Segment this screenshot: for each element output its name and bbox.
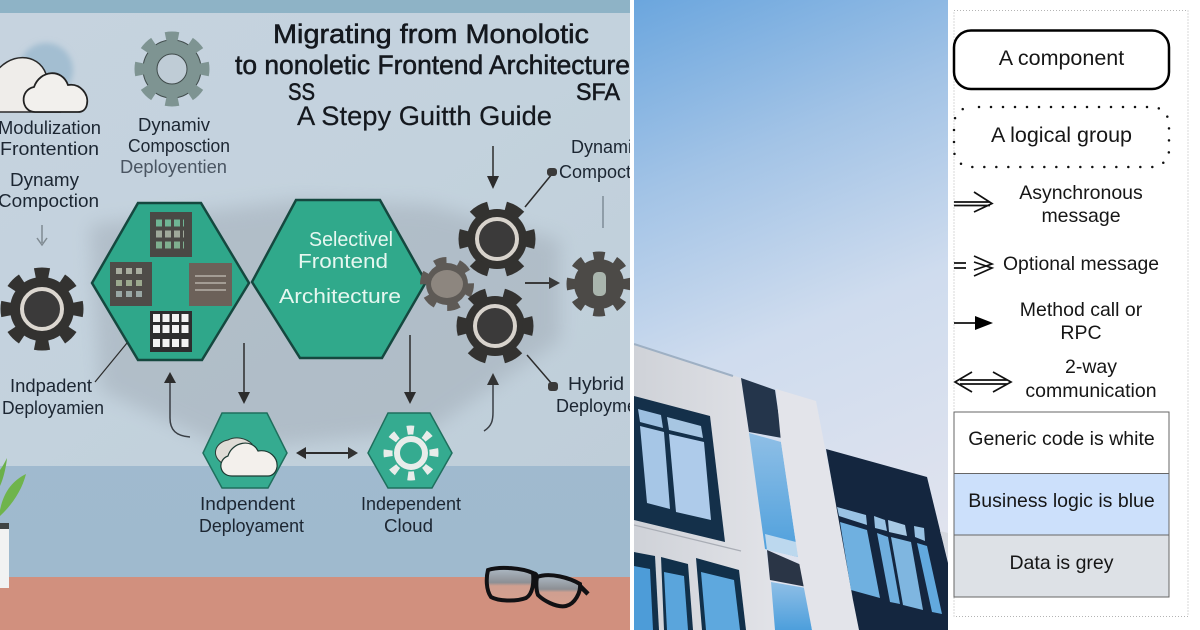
window glass upper left: [638, 409, 711, 520]
arrow: grey down: [37, 225, 47, 245]
label: modulization: Compoction: [0, 191, 99, 211]
legend: asynchronous message: message: [1041, 205, 1121, 227]
icon: black gear lower: [462, 293, 528, 359]
label: independent deployment bottom: Deployament: [199, 516, 304, 536]
title: SS: [288, 79, 315, 106]
arrow: into upper gear: [487, 146, 499, 189]
title: SFA: [576, 79, 620, 106]
row: data: [954, 535, 1169, 597]
title: Migrating from Monolotic: [273, 19, 589, 49]
icon: plant: [0, 458, 26, 588]
label: independent deployment bottom: [199, 494, 304, 536]
label: dynamic composition: Composction: [128, 136, 230, 156]
window frame upper left: [634, 396, 725, 542]
label: independent cloud: Cloud: [384, 516, 433, 536]
hexagon: modules: [92, 203, 249, 360]
legend: component: A component: [999, 46, 1124, 70]
legend: logical group: [954, 107, 1169, 167]
legend: 2-way communication: [955, 356, 1157, 402]
title: [235, 19, 630, 131]
legend: asynchronous message: [954, 182, 1143, 227]
arrow: down to cloud hex: [238, 343, 250, 404]
connector: upper gear to label: [525, 168, 557, 207]
icon: glasses: [487, 568, 588, 606]
label: independent deployment bottom: Indpendent: [200, 494, 295, 514]
roof edge: [634, 344, 733, 376]
card: left module: [110, 262, 152, 306]
label: hybrid deployment: [556, 374, 652, 416]
right edge block: [940, 531, 948, 560]
dark band: [767, 550, 807, 587]
connector: lower gear to hybrid: [527, 355, 558, 391]
panel: building photo: [634, 0, 948, 630]
legend: colour key table: [954, 412, 1169, 597]
legend: logical group: A logical group: [991, 123, 1132, 147]
panel: legend: [948, 0, 1200, 630]
legend: method call: RPC: [1060, 322, 1102, 344]
brick floor line: [634, 525, 741, 551]
dark block: [826, 449, 948, 630]
board shadow area: [90, 200, 560, 450]
middle glass: [749, 433, 798, 557]
middle dark strip: [741, 378, 782, 438]
legend dotted border: [954, 10, 1188, 616]
title: A Stepy Guitth Guide: [297, 101, 552, 131]
label: modulization: Modulization: [0, 118, 101, 138]
icon: grey gear: [140, 37, 204, 101]
arrow: down to gear hex: [404, 335, 416, 404]
lower left windows: [634, 552, 746, 630]
label: hybrid deployment: Hybrid: [568, 374, 624, 394]
label: dynamic right: Dynamic: [571, 137, 641, 157]
legend: component: [954, 30, 1169, 89]
divider: white strip between images: [630, 0, 634, 630]
legend: 2-way communication: 2-way: [1065, 356, 1117, 378]
row: business logic: [954, 474, 1169, 535]
label: dynamic right: Compoction: [559, 162, 655, 182]
label: dynamic right: [559, 137, 655, 182]
label: independent deployment left: [2, 376, 104, 418]
hexagon: selective frontend architecture: Frontend: [298, 251, 388, 273]
label: independent deployment left: Deployamien: [2, 398, 104, 418]
white brick block right: [776, 389, 860, 630]
hexagon: selective frontend architecture: Architecture: [279, 286, 401, 308]
hexagon: cloud: [203, 413, 287, 488]
label: modulization: [0, 118, 101, 211]
icon: black gear upper: [464, 206, 530, 272]
sky: [634, 0, 948, 630]
row: data: Data is grey: [1009, 552, 1114, 574]
label: modulization: Dynamy: [10, 170, 79, 190]
icon: black gear left: [6, 273, 78, 345]
label: hybrid deployment: Deployment: [556, 396, 652, 416]
row: business logic: Business logic is blue: [968, 490, 1155, 512]
label: modulization: Frontention: [0, 139, 99, 159]
hexagon: gear: [368, 413, 452, 488]
legend: method call: Method call or: [1020, 299, 1143, 321]
card: grid module: [150, 311, 192, 352]
arrow: curved up to modules: [164, 372, 190, 437]
legend: 2-way communication: communication: [1025, 380, 1157, 402]
hexagon: selective frontend architecture: [252, 200, 426, 358]
arrow: to right gear: [525, 277, 560, 289]
title: to nonoletic Frontend Architecture: [235, 50, 630, 80]
dark block windows: [837, 507, 942, 614]
label: independent cloud: Independent: [361, 494, 461, 514]
wall background: [0, 0, 630, 577]
arrow: two-way between hexes: [296, 447, 358, 459]
wall board: [0, 13, 630, 466]
card: top module: [150, 212, 192, 257]
lower middle glass: [771, 582, 812, 630]
stroke: faint vertical: [602, 196, 604, 228]
label: dynamic composition: Dynamiv: [138, 115, 210, 135]
connector: modules to label: [95, 343, 127, 382]
icon: right gear: [571, 256, 627, 312]
label: dynamic composition: [120, 115, 230, 177]
row: generic code: [954, 412, 1169, 474]
top wall band: [0, 0, 630, 13]
white brick block left: [634, 344, 777, 630]
hexagon: selective frontend architecture: Selectivel: [309, 229, 393, 251]
desk: [0, 577, 630, 630]
pale lower pane: [765, 534, 798, 557]
legend: optional message: Optional message: [1003, 253, 1159, 275]
label: dynamic composition: Deployentien: [120, 157, 227, 177]
icon: small blurred gear: [424, 261, 470, 307]
arrow: curved up to lower gear: [484, 373, 499, 431]
card: right module: [189, 263, 232, 306]
label: independent cloud: [361, 494, 461, 536]
panel: left illustration: [0, 0, 655, 630]
row: generic code: Generic code is white: [968, 428, 1155, 450]
legend background: [948, 0, 1200, 630]
legend: asynchronous message: Asynchronous: [1019, 182, 1143, 204]
icon: clouds top left: [0, 43, 87, 112]
label: independent deployment left: Indpadent: [10, 376, 92, 396]
legend: method call: [954, 299, 1143, 344]
